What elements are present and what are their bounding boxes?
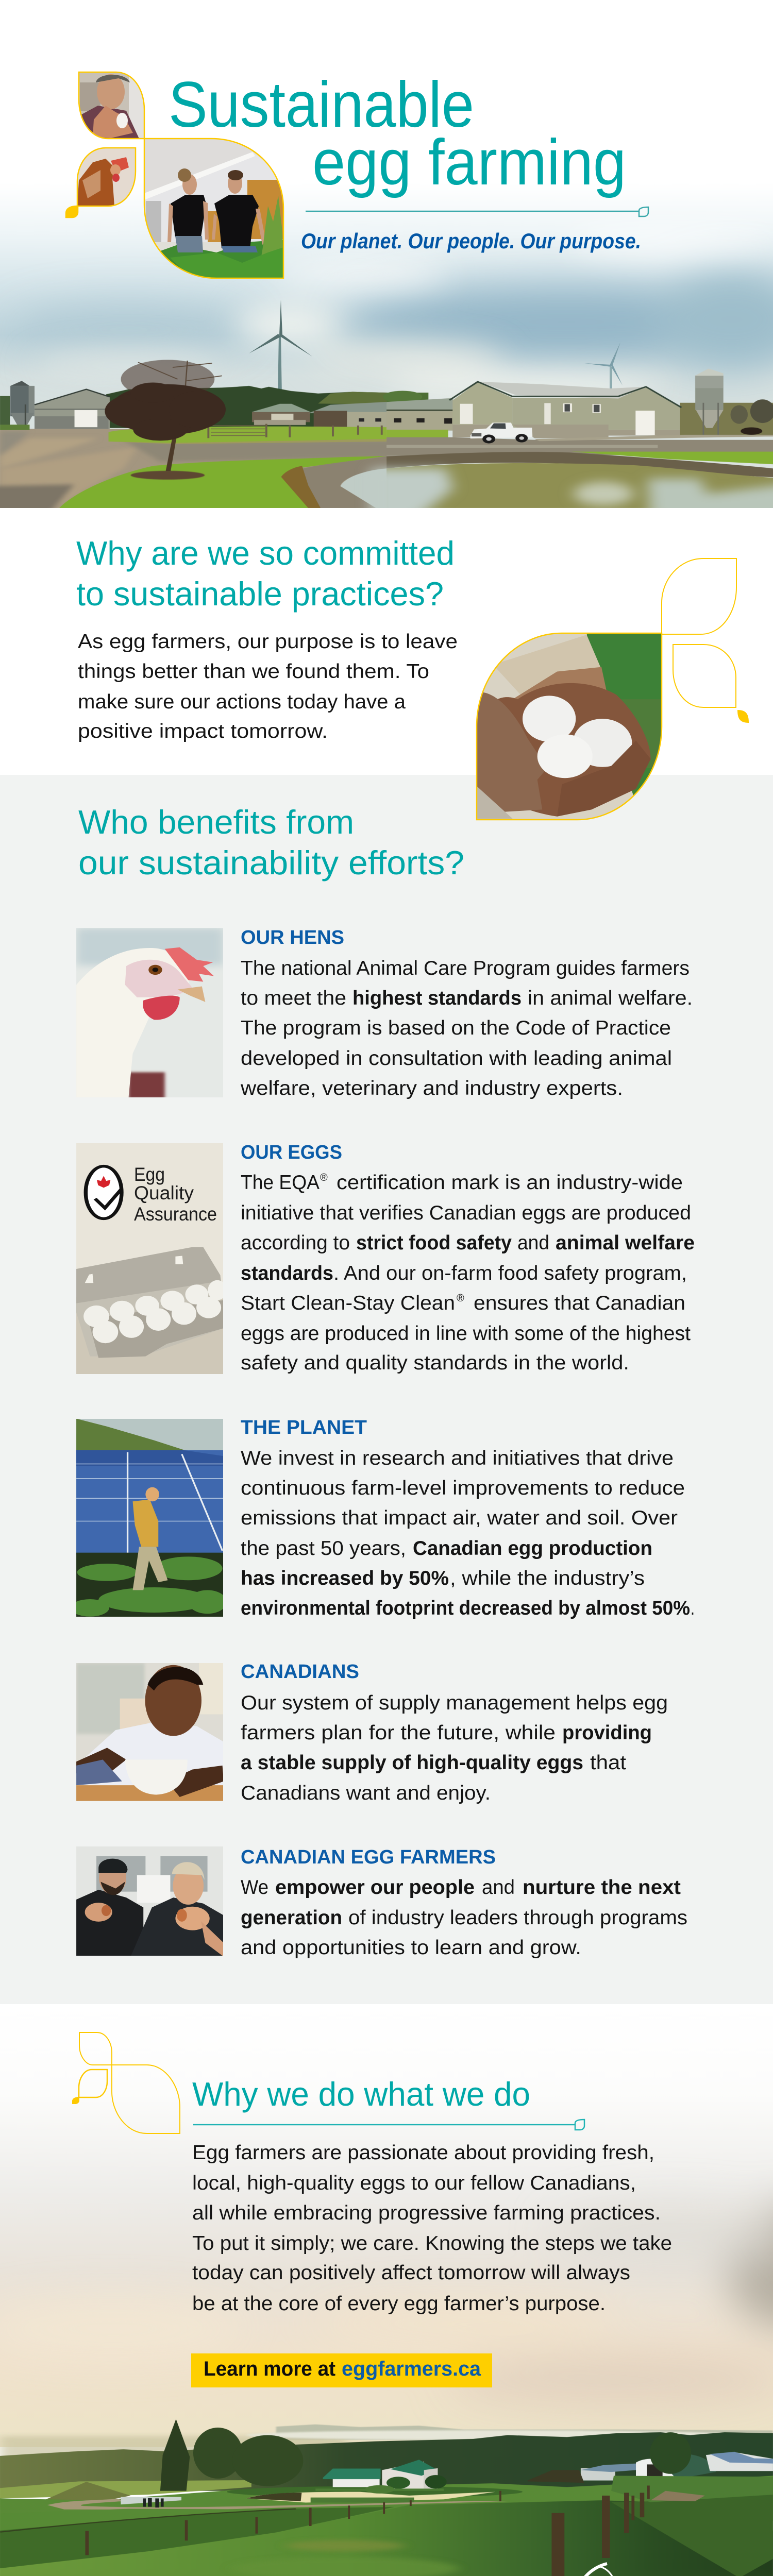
text: the planet: Canadian egg production [413,1537,652,1560]
front lawn [59,456,386,508]
call to action button: Learn more at [204,2358,335,2380]
leaf outlines: commitment [477,558,749,820]
tall pine [160,2419,190,2491]
title: Sustainable [169,69,474,141]
closing section: sky and farm landscape photo [0,2004,773,2576]
benefits heading: Who benefits from [78,803,354,841]
grass behind pond [572,452,773,464]
photo: brown hen [77,148,136,206]
photo: egg quality assurance and carton [76,1143,227,1375]
commitment heading [76,534,455,613]
closing text: today can positively affect tomorrow will always [192,2262,630,2284]
closing text: local, high-quality eggs to our fellow Canadians, [192,2172,636,2194]
far fields [0,2480,251,2498]
text: canadians: Our system of supply management helps egg [241,1692,668,1714]
grain silo left [9,381,35,429]
item: the planet [71,1417,695,1619]
label: our hens: OUR HENS [241,927,344,948]
text: our eggs: safety and quality standards in the world. [241,1352,629,1374]
farmhouse with green roof [323,2460,438,2488]
closing text: be at the core of every egg farmer’s purpose. [192,2293,606,2315]
tree [105,360,226,471]
text: the planet: emissions that impact air, water and soil. Over [241,1507,678,1529]
photo: two farmers in a field [144,139,283,278]
closing rule with leaf end [193,2120,584,2130]
text: canadian egg farmers: nurture the next [523,1876,681,1899]
silo right [695,368,724,435]
photo: two farmers holding eggs [76,1846,224,1957]
wind turbine large [249,300,312,396]
closing heading: Why we do what we do [192,2075,530,2113]
benefits heading [78,803,464,882]
label: canadians: CANADIANS [241,1661,359,1683]
text: our eggs: standards [241,1262,333,1284]
text: canadians: a stable supply of high-quality eggs [241,1752,583,1774]
text: the planet: . [691,1597,695,1619]
commitment text: As egg farmers, our purpose is to leave [78,631,458,653]
commitment text: things better than we found them. To [78,660,429,683]
yard gravel [0,429,386,508]
text: canadians [241,1692,668,1804]
label: the planet: THE PLANET [241,1417,367,1438]
text: canadians: Canadians want and enjoy. [241,1782,491,1804]
text: our eggs: and [517,1232,549,1254]
title rule with leaf end [306,207,648,216]
text: our eggs: certification mark is an industry-wide [337,1172,683,1194]
closing text: Egg farmers are passionate about providing fresh, [192,2142,654,2164]
tree cluster [193,2428,303,2486]
text: canadian egg farmers: and opportunities to learn and grow. [241,1937,581,1959]
text: canadians: that [590,1752,626,1774]
pond rocks left [303,457,386,508]
text: our hens: to meet the [241,987,346,1009]
pond corner left [340,468,386,508]
long barn right part [386,398,453,431]
photo: eggs in hands [473,633,665,821]
text: the planet: continuous farm-level improvements to reduce [241,1477,685,1499]
hero section: sky and farm photo [0,122,773,508]
gravel road [47,2499,508,2510]
call to action button: eggfarmers.ca [342,2358,481,2380]
wind turbine small [585,343,623,388]
white fence and people [121,2497,181,2504]
rock wall [386,452,773,477]
text: canadians: farmers plan for the future, while [241,1722,556,1744]
text: the planet [241,1447,695,1619]
photo: boy with bowl [76,1663,225,1801]
text: our eggs [241,1172,695,1374]
pickup truck [470,422,532,444]
text: our eggs: . And our on-farm food safety program, [333,1262,687,1284]
photo: farmer with egg [79,72,144,139]
text: our hens: in animal welfare. [528,987,693,1009]
cow [741,427,762,435]
leaf frame outlines: hero [66,72,283,278]
mid grass [0,2476,773,2570]
text: canadian egg farmers: and [482,1876,515,1899]
commitment text: make sure our actions today have a [78,691,406,713]
text: our eggs: eggs are produced in line with some of the highest [241,1323,691,1345]
left farm buildings, trees and yard [0,360,419,519]
tree line [0,2432,773,2491]
text: the planet: We invest in research and initiatives that drive [241,1447,674,1469]
pond water [386,463,773,508]
barn left [35,389,110,429]
logo: Egg Farmers of Canada [575,2564,728,2576]
text: canadian egg farmers: We [241,1876,268,1899]
fence and gate [208,424,382,438]
title: egg farming [312,127,626,198]
text: canadian egg farmers: empower our people [275,1876,475,1899]
pond [246,2485,495,2502]
right barn, truck, silo and pond [372,368,773,519]
icon: egg and maple leaf [575,2564,618,2576]
fence posts [85,2485,650,2576]
icon: EQA mark [86,1166,122,1218]
commitment text: positive impact tomorrow. [78,720,328,742]
text: our eggs: according to [241,1232,350,1254]
text: our hens: The national Animal Care Program guides farmers [241,957,690,979]
item: canadians [76,1661,668,1804]
text: the planet: environmental footprint decreased by almost 50% [241,1597,690,1619]
EQA wordmark: Quality [134,1182,194,1204]
closing text: all while embracing progressive farming practices. [192,2202,661,2224]
text: our eggs: ® [457,1293,464,1304]
lower left field [0,2507,394,2568]
text: our eggs: animal welfare [556,1232,695,1254]
text: our hens: highest standards [352,987,522,1009]
text: our hens: developed in consultation with leading animal [241,1047,672,1070]
text: the planet: has increased by 50% [241,1567,449,1589]
grey benefits panel background [0,775,773,2004]
text: our eggs: strict food safety [356,1232,512,1254]
text: canadians: providing [562,1722,652,1744]
closing text: To put it simply; we care. Knowing the steps we take [192,2232,672,2255]
commitment heading: to sustainable practices? [76,575,444,613]
title [169,69,626,198]
tagline: Our planet. Our people. Our purpose. [301,229,641,253]
right farm buildings [581,2432,773,2481]
commitment text [78,631,458,742]
label: our eggs: OUR EGGS [241,1142,342,1163]
text: our eggs: ® [320,1172,328,1183]
main barn [449,382,681,438]
benefits heading: our sustainability efforts? [78,844,464,882]
EQA wordmark: Egg [134,1164,165,1185]
commitment heading: Why are we so committed [76,534,455,572]
photo: farmer by solar panels [71,1419,227,1618]
distant hills and mist [276,2425,773,2440]
foreground hill grass [0,2500,773,2576]
item: our eggs [76,1142,695,1375]
label: canadian egg farmers: CANADIAN EGG FARMERS [241,1846,496,1868]
EQA wordmark [134,1164,217,1225]
text: our hens: welfare, veterinary and industry experts. [240,1077,623,1099]
text: our hens: The program is based on the Code of Practice [241,1017,671,1039]
text: canadian egg farmers [241,1876,687,1959]
text: our hens [240,957,693,1099]
text: the planet: , while the industry’s [450,1567,645,1589]
text: our eggs: ensures that Canadian [474,1292,685,1314]
text: our eggs: initiative that verifies Canadian eggs are produced [241,1202,691,1224]
photo: white hen [76,928,224,1099]
text: canadian egg farmers: generation [241,1907,342,1929]
closing text [192,2142,672,2315]
item: our hens [76,927,693,1099]
text: canadian egg farmers: of industry leaders through programs [348,1907,687,1929]
EQA wordmark: Assurance [134,1204,217,1225]
gravel foreground [386,437,773,455]
text: the planet: the past 50 years, [241,1537,406,1560]
text: our eggs: Start Clean-Stay Clean [241,1292,455,1314]
call to action button [191,2353,492,2387]
text: our eggs: The EQA [241,1172,320,1194]
shed and long barn [251,402,386,428]
item: canadian egg farmers [76,1846,687,1959]
leaf outlines: closing [73,2032,180,2133]
